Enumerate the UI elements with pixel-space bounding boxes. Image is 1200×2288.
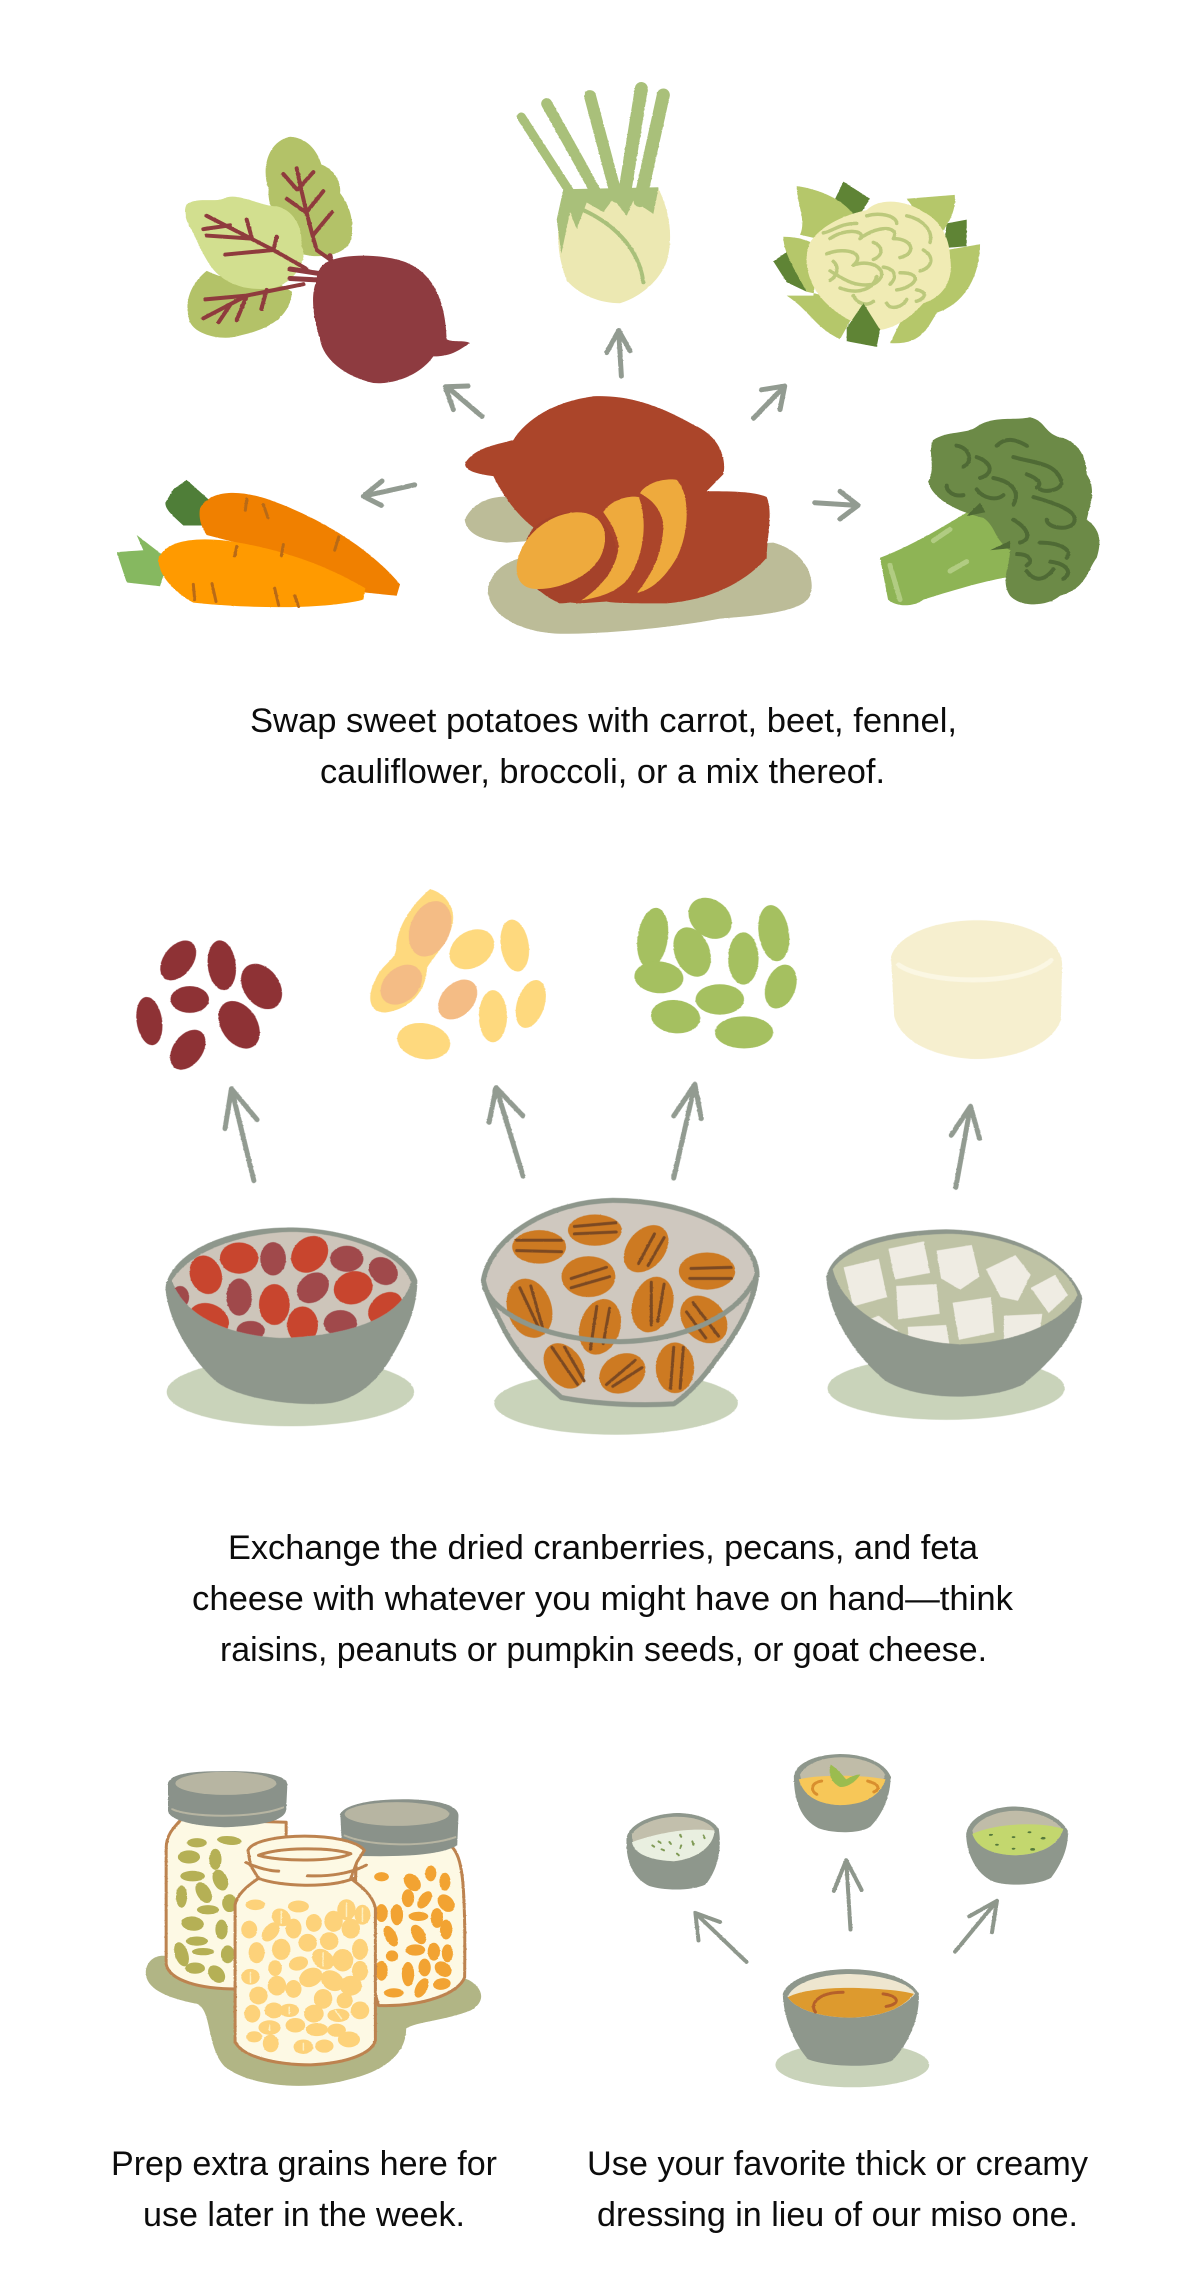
text: topping swap caption: raisins, peanuts or pumpkin seeds, or goat cheese. (220, 1631, 987, 1669)
icon: broccoli (880, 417, 1099, 605)
icon: pumpkin seeds (628, 895, 801, 1048)
arrow: pecans to pumpkin seeds (674, 1084, 701, 1178)
text: dressing caption: Use your favorite thick or creamy (587, 2145, 1089, 2183)
panel: vegetable swaps (117, 88, 1099, 634)
icon: top yellow dressing bowl (794, 1754, 891, 1832)
text: dressing caption (587, 2145, 1089, 2234)
text: grains caption: use later in the week. (143, 2196, 465, 2234)
text: dressing caption: dressing in lieu of our miso one. (597, 2196, 1078, 2234)
arrow: to carrots (363, 481, 415, 505)
icon: carrots (117, 480, 400, 607)
text: grains caption: Prep extra grains here for (111, 2145, 497, 2183)
icon: peanuts (370, 889, 551, 1064)
text: grains caption (111, 2145, 497, 2234)
icon: glass bowl of pecans (483, 1200, 757, 1435)
icon: bowl of dried cranberries (165, 1227, 417, 1426)
icon: right green dressing bowl (966, 1806, 1068, 1885)
arrow: feta to goat cheese (951, 1106, 979, 1187)
icon: raisins (134, 938, 289, 1072)
icon: left white dressing bowl (626, 1813, 720, 1890)
text: vegetable swap caption: Swap sweet potatoes with carrot, beet, fennel, (250, 702, 957, 740)
icon: front jar (235, 1836, 375, 2065)
arrow: cranberries to raisins (225, 1089, 257, 1181)
text: topping swap caption: Exchange the dried cranberries, pecans, and feta (228, 1529, 979, 1567)
arrow: dressing to left bowl (695, 1913, 746, 1962)
icon: bowl of feta cubes (826, 1229, 1082, 1420)
text: topping swap caption (192, 1529, 1014, 1669)
arrow: to cauliflower (753, 386, 785, 418)
text: vegetable swap caption (250, 702, 957, 791)
icon: goat cheese (891, 920, 1062, 1059)
text: vegetable swap caption: cauliflower, broccoli, or a mix thereof. (320, 753, 885, 791)
arrow: to fennel (607, 331, 630, 376)
panel: grains and dressing (146, 1754, 1068, 2087)
icon: cauliflower (773, 182, 980, 347)
icon: sweet potatoes (465, 396, 812, 634)
panel: topping swaps (134, 889, 1082, 1435)
arrow: pecans to peanuts (489, 1088, 523, 1176)
icon: beet (185, 137, 470, 383)
arrow: dressing to top bowl (834, 1860, 862, 1930)
icon: left jar (166, 1771, 287, 1989)
arrow: to beet (445, 386, 482, 416)
arrow: to broccoli (815, 491, 858, 519)
icon: grain jars (146, 1771, 481, 2086)
icon: bottom miso dressing bowl (775, 1969, 929, 2087)
icon: fennel (521, 88, 670, 303)
icon: right jar (340, 1799, 465, 2006)
text: topping swap caption: cheese with whatever you might have on hand—think (192, 1580, 1014, 1618)
arrow: dressing to right bowl (955, 1901, 997, 1952)
